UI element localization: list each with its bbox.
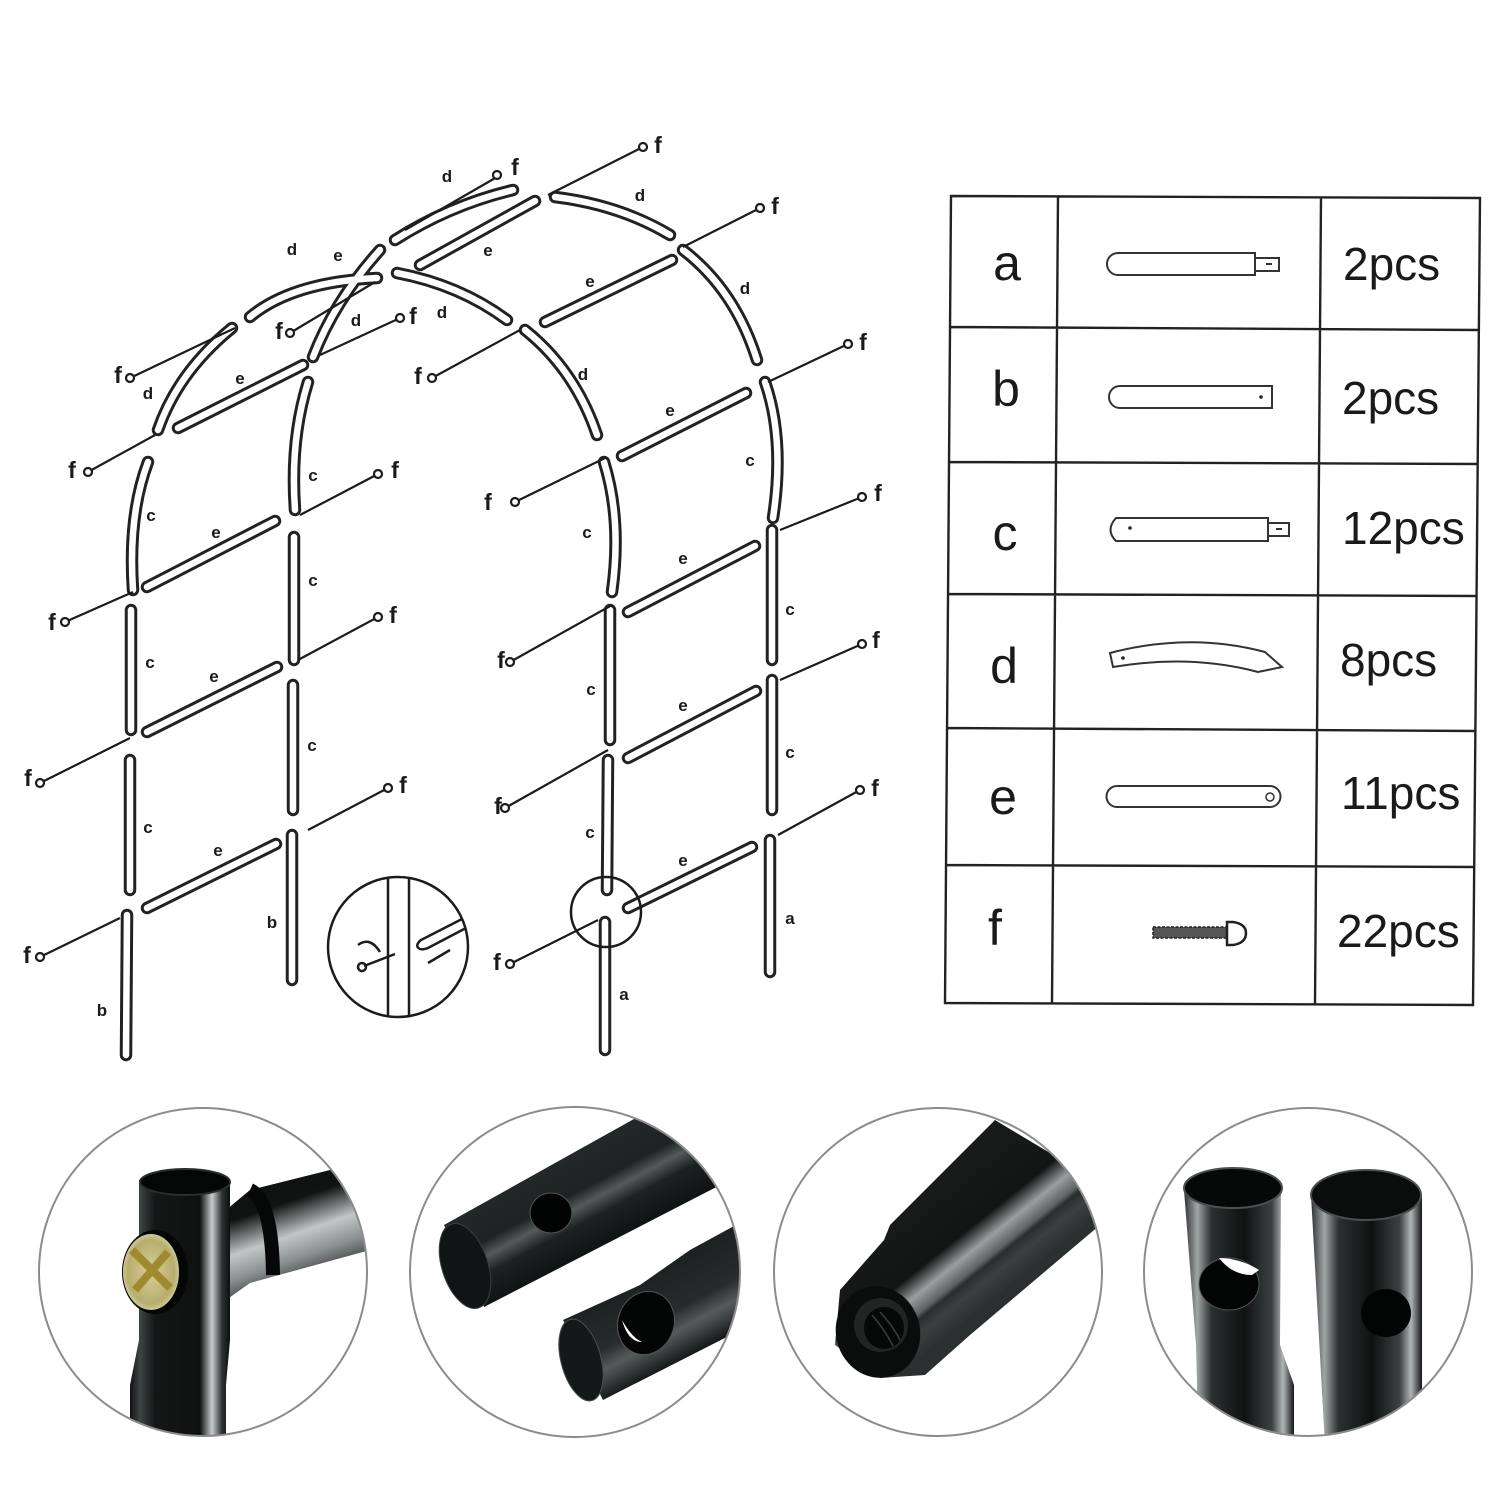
- letter labels on the diagram: d: [578, 365, 588, 384]
- assembly diagram: arch frame exploded view: [23, 132, 882, 1055]
- row e: 11pcs: [1341, 767, 1460, 819]
- row f: 22pcs: [1337, 905, 1460, 957]
- screw head: [122, 1230, 188, 1314]
- letter labels on the diagram: d: [287, 240, 297, 259]
- letter labels on the diagram: d: [143, 384, 153, 403]
- row e: [989, 767, 1460, 825]
- letter labels on the diagram: d: [442, 167, 452, 186]
- tube parts a to e: [126, 190, 778, 1055]
- letter labels on the diagram: f: [24, 765, 32, 791]
- letter labels on the diagram: e: [209, 667, 219, 686]
- row c: [992, 502, 1465, 561]
- letter labels on the diagram: f: [23, 942, 31, 968]
- letter labels on the diagram: f: [654, 132, 662, 158]
- letter labels on the diagram: c: [308, 571, 318, 590]
- letter labels on the diagram: f: [275, 318, 283, 344]
- letter labels on the diagram: e: [585, 272, 595, 291]
- row a: a: [993, 235, 1021, 291]
- letter labels on the diagram: b: [97, 1001, 107, 1020]
- letter labels on the diagram: a: [785, 909, 795, 928]
- letter labels on the diagram: c: [146, 506, 156, 525]
- letter labels on the diagram: e: [213, 841, 223, 860]
- letter labels on the diagram: c: [308, 466, 318, 485]
- letter labels on the diagram: f: [484, 489, 492, 515]
- letter labels on the diagram: f: [399, 772, 407, 798]
- letter labels on the diagram: d: [351, 311, 361, 330]
- row c: c: [992, 505, 1018, 561]
- letter labels on the diagram: f: [68, 457, 76, 483]
- row e: e: [989, 769, 1017, 825]
- letter labels on the diagram: [23, 132, 882, 1020]
- letter labels on the diagram: f: [494, 793, 502, 819]
- letter labels on the diagram: d: [437, 303, 447, 322]
- row d: d: [990, 638, 1018, 694]
- horizontal tube: [230, 1170, 365, 1298]
- letter labels on the diagram: f: [872, 627, 880, 653]
- letter labels on the diagram: d: [635, 186, 645, 205]
- letter labels on the diagram: f: [497, 647, 505, 673]
- row b: [992, 361, 1439, 424]
- letter labels on the diagram: f: [859, 329, 867, 355]
- letter labels on the diagram: e: [678, 851, 688, 870]
- table grid: [945, 196, 1480, 1005]
- letter labels on the diagram: b: [267, 913, 277, 932]
- row c: 12pcs: [1342, 502, 1465, 554]
- letter labels on the diagram: d: [740, 279, 750, 298]
- letter labels on the diagram: c: [307, 736, 317, 755]
- photo circle 3: threaded nut end: [774, 1108, 1102, 1436]
- parts table: [945, 196, 1480, 1005]
- screws f: [36, 143, 866, 968]
- letter labels on the diagram: c: [586, 680, 596, 699]
- highlight circle on joint: [571, 877, 641, 947]
- letter labels on the diagram: e: [678, 549, 688, 568]
- row b: 2pcs: [1342, 372, 1439, 424]
- row f: f: [988, 900, 1002, 956]
- letter labels on the diagram: e: [235, 369, 245, 388]
- letter labels on the diagram: f: [493, 949, 501, 975]
- letter labels on the diagram: c: [785, 600, 795, 619]
- row b: b: [992, 361, 1020, 417]
- row d: 8pcs: [1340, 634, 1437, 686]
- row d: [990, 634, 1437, 694]
- letter labels on the diagram: e: [333, 246, 343, 265]
- letter labels on the diagram: e: [665, 401, 675, 420]
- letter labels on the diagram: c: [145, 653, 155, 672]
- letter labels on the diagram: f: [511, 154, 519, 180]
- vertical tube: [130, 1180, 230, 1440]
- letter labels on the diagram: f: [114, 362, 122, 388]
- letter labels on the diagram: e: [678, 696, 688, 715]
- letter labels on the diagram: c: [745, 451, 755, 470]
- letter labels on the diagram: c: [582, 523, 592, 542]
- letter labels on the diagram: f: [391, 457, 399, 483]
- letter labels on the diagram: f: [874, 480, 882, 506]
- row f: [988, 900, 1460, 957]
- letter labels on the diagram: f: [414, 363, 422, 389]
- photo circle 1: screw joint: [39, 1108, 370, 1440]
- letter labels on the diagram: f: [871, 775, 879, 801]
- letter labels on the diagram: c: [143, 818, 153, 837]
- letter labels on the diagram: f: [409, 303, 417, 329]
- letter labels on the diagram: e: [483, 241, 493, 260]
- letter labels on the diagram: e: [211, 523, 221, 542]
- letter labels on the diagram: f: [48, 609, 56, 635]
- letter labels on the diagram: f: [389, 602, 397, 628]
- row a: [993, 235, 1440, 291]
- row a: 2pcs: [1343, 238, 1440, 290]
- letter labels on the diagram: a: [619, 985, 629, 1004]
- letter labels on the diagram: c: [585, 823, 595, 842]
- photo circle 2: tube ends with holes: [410, 1107, 760, 1437]
- detail circle: screw connection: [328, 877, 468, 1017]
- letter labels on the diagram: f: [771, 193, 779, 219]
- photo circle 4: two tubes with holes: [1144, 1108, 1472, 1445]
- letter labels on the diagram: c: [785, 743, 795, 762]
